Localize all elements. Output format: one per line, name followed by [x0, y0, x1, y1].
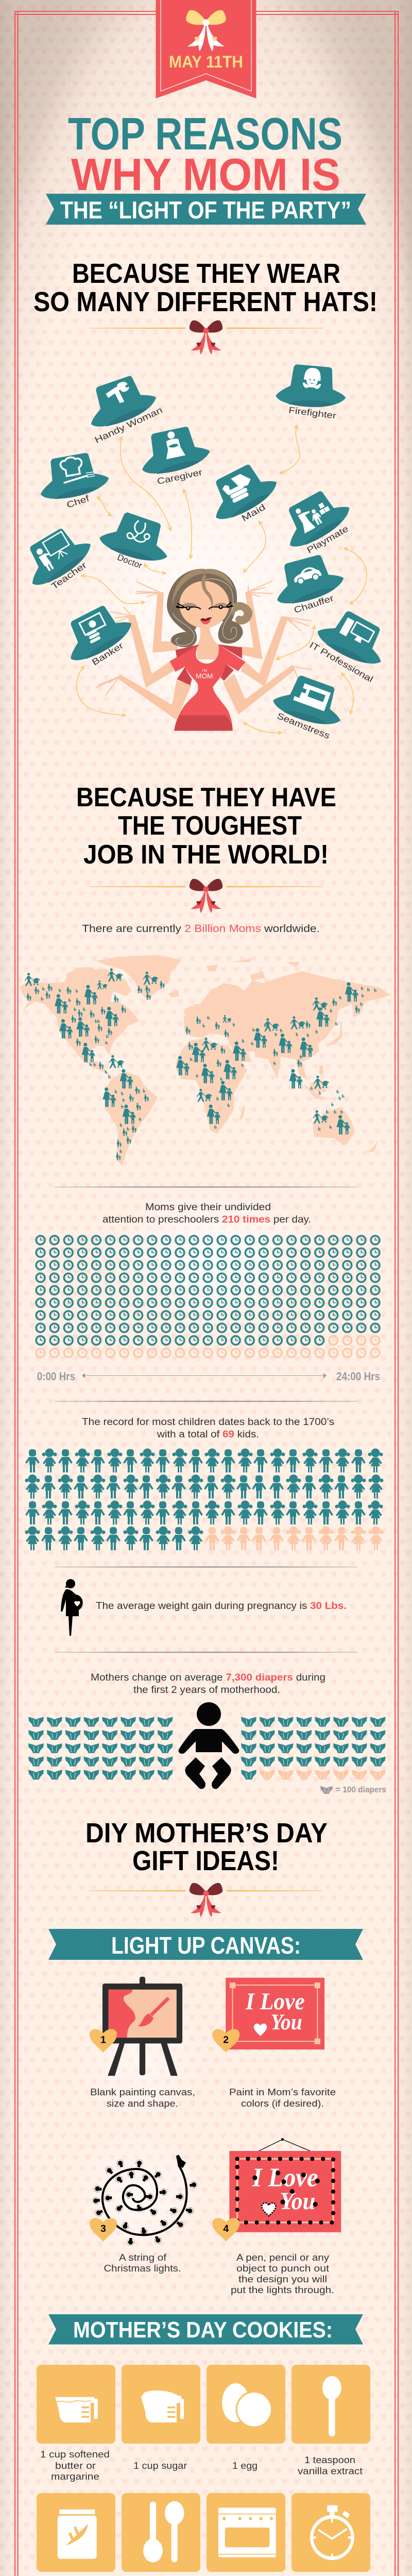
icon: eggs — [222, 2383, 272, 2427]
time axis: 0:00 Hrs — [37, 1370, 75, 1383]
text: diapers: the first 2 years of motherhood. — [133, 1685, 280, 1696]
captions: cookie row 1: 1 cup softened — [40, 2449, 110, 2460]
divider — [55, 1187, 357, 1188]
hat: Chauffer — [268, 550, 347, 608]
heading: toughest job: JOB IN THE WORLD! — [83, 840, 329, 870]
captions: canvas steps: size and shape. — [107, 2098, 178, 2109]
heading: DIY gift ideas — [85, 1818, 328, 1876]
world map with moms — [20, 955, 391, 1166]
step number 4 — [212, 2218, 239, 2242]
captions: cookie row 1: vanilla extract — [298, 2466, 363, 2476]
label: Seamstress: Seamstress — [276, 711, 331, 741]
legend: 100 diapers: = 100 diapers — [336, 1785, 386, 1794]
heading: toughest job: BECAUSE THEY HAVE — [76, 783, 336, 812]
captions: canvas steps: put the lights through. — [231, 2285, 334, 2295]
captions: canvas steps — [90, 2087, 336, 2295]
header ribbon: May 11th — [156, 0, 256, 98]
captions: cookie row 1 — [40, 2449, 363, 2482]
icon: painted card: You — [271, 2010, 302, 2035]
icon: teaspoon — [322, 2376, 341, 2436]
text: undivided attention — [102, 1202, 311, 1225]
panel: cookie recipe tiles — [37, 2365, 370, 2572]
label: IT Professional: IT Professional — [308, 640, 375, 684]
icon: punched hanging card — [229, 2138, 341, 2232]
hat: Doctor — [97, 506, 177, 568]
captions: canvas steps: colors (if desired). — [241, 2098, 324, 2109]
label: Firefighter: Firefighter — [288, 405, 337, 421]
icon: baby — [179, 1702, 239, 1789]
hat: Seamstress — [270, 669, 350, 732]
captions: canvas steps: Paint in Mom’s favorite — [229, 2087, 336, 2097]
title: WHY MOM IS — [71, 149, 340, 200]
icon: easel — [102, 1977, 182, 2076]
icon: flour jar — [58, 2510, 97, 2559]
title: TOP REASONS — [68, 108, 342, 159]
divider — [55, 1566, 357, 1567]
label: Teacher: Teacher — [49, 560, 89, 591]
text: diapers: Mothers change on average 7,300 diapers during — [91, 1672, 325, 1683]
hat: IT Professional — [314, 602, 395, 672]
tiny mom icons — [41, 986, 376, 1153]
hat: Caregiver — [135, 423, 212, 478]
hat: Handy Woman — [80, 370, 160, 432]
step number 2 — [212, 2029, 239, 2053]
step number 3 — [90, 2218, 117, 2242]
kids pictogram — [25, 1449, 383, 1550]
banner: cookies: MOTHER’S DAY COOKIES: — [73, 2317, 333, 2343]
icon: punched hanging card: I Love — [252, 2163, 318, 2192]
land masses — [20, 955, 391, 1166]
diaper pictogram left — [27, 1715, 174, 1781]
label: Handy Woman: Handy Woman — [93, 405, 164, 445]
icon: punched hanging card: You — [280, 2188, 315, 2215]
hat: Chef — [35, 450, 111, 502]
hat: Playmate — [274, 482, 355, 552]
icon: butter cup — [55, 2397, 98, 2422]
captions: cookie row 1: butter or — [55, 2461, 96, 2471]
label: Chauffer: Chauffer — [293, 593, 335, 615]
heading: hats: BECAUSE THEY WEAR — [72, 258, 340, 289]
captions: cookie row 1: 1 cup sugar — [133, 2461, 187, 2471]
icon: baking spoons — [143, 2501, 184, 2563]
mom character: I’M — [202, 669, 207, 673]
captions: canvas steps: the design you will — [238, 2274, 327, 2284]
icon: oven — [218, 2507, 276, 2557]
heading: toughest job — [76, 783, 336, 870]
text: diapers — [91, 1672, 325, 1696]
icon: painted card — [226, 1978, 324, 2049]
hat: Maid — [201, 456, 282, 525]
mom character: MOM — [196, 673, 213, 680]
heading: hats — [33, 258, 377, 317]
banner: light up canvas: LIGHT UP CANVAS: — [111, 1932, 301, 1959]
diaper pictogram right — [239, 1715, 387, 1781]
date: MAY 11TH — [169, 53, 243, 71]
text: 2 billion moms: There are currently 2 Billion Moms worldwide. — [82, 923, 320, 935]
step number 1 — [90, 2029, 117, 2053]
icon: header bow — [186, 10, 226, 51]
panel: canvas steps — [90, 1977, 341, 2246]
label: Caregiver: Caregiver — [156, 467, 203, 486]
panel: hats around mom — [15, 363, 395, 741]
hat: Teacher — [15, 519, 97, 591]
bow divider — [89, 1883, 323, 1917]
step number 4: 4 — [223, 2223, 229, 2234]
text: weight gain: The average weight gain during pregnancy is 30 Lbs. — [96, 1601, 347, 1612]
captions: cookie row 1: 1 teaspoon — [304, 2455, 355, 2465]
bow divider — [89, 879, 323, 913]
divider — [55, 1401, 357, 1402]
captions: canvas steps: A pen, pencil or any — [236, 2252, 329, 2263]
clock grid chart — [33, 1234, 382, 1359]
title: THE “LIGHT OF THE PARTY” — [60, 196, 351, 224]
divider — [55, 1652, 357, 1653]
text: record children — [82, 1417, 334, 1440]
time axis — [37, 1370, 380, 1383]
label: Playmate: Playmate — [305, 524, 350, 555]
heading: DIY gift ideas: GIFT IDEAS! — [132, 1845, 279, 1876]
captions: canvas steps: A string of — [119, 2252, 167, 2263]
hat: Banker — [56, 598, 137, 666]
label: Banker: Banker — [90, 640, 125, 667]
label: Maid: Maid — [240, 502, 267, 523]
step number 2: 2 — [223, 2034, 229, 2045]
stroller icons — [25, 969, 329, 1124]
bow divider — [89, 320, 323, 354]
captions: cookie row 1: margarine — [51, 2471, 99, 2482]
mom character — [167, 569, 252, 731]
heading: DIY gift ideas: DIY MOTHER’S DAY — [85, 1818, 328, 1849]
hat: Firefighter — [275, 363, 348, 410]
heading: toughest job: THE TOUGHEST — [118, 811, 302, 841]
text: record children: with a total of 69 kids. — [157, 1429, 259, 1440]
mom's arms — [96, 581, 313, 720]
text: record children: The record for most children dates back to the 1700’s — [82, 1417, 334, 1428]
heading: hats: SO MANY DIFFERENT HATS! — [33, 286, 377, 317]
time axis: 24:00 Hrs — [336, 1370, 380, 1383]
title — [46, 108, 366, 225]
captions: cookie row 1: 1 egg — [232, 2461, 258, 2471]
icons: cookie ingredients and steps — [55, 2376, 353, 2563]
icon: string of lights — [92, 2155, 198, 2246]
captions: canvas steps: Christmas lights. — [104, 2263, 181, 2274]
step number 3: 3 — [100, 2223, 106, 2234]
captions: canvas steps: object to punch out — [236, 2263, 329, 2274]
arrows — [77, 425, 367, 733]
small mom icons — [26, 981, 360, 1160]
step number 1: 1 — [100, 2034, 106, 2045]
banner: light up canvas — [48, 1929, 363, 1960]
label: Chef: Chef — [65, 493, 91, 510]
big mom and child icons — [55, 982, 358, 1134]
label: Doctor: Doctor — [116, 552, 144, 571]
icon: painted card: I Love — [245, 1988, 305, 2015]
text: undivided attention: attention to preschoolers 210 times per day. — [102, 1214, 311, 1225]
icon: sugar cup — [141, 2391, 184, 2422]
icon: pregnant woman — [61, 1579, 83, 1636]
text: undivided attention: Moms give their undivided — [145, 1202, 271, 1213]
icon: timer — [312, 2505, 353, 2558]
captions: canvas steps: Blank painting canvas, — [90, 2087, 195, 2097]
